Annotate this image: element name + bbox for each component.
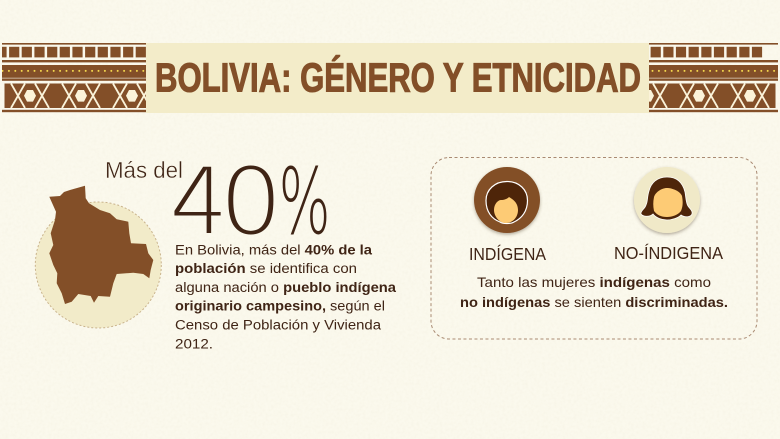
map circle with Bolivia silhouette bbox=[35, 186, 161, 328]
text block: population description: En Bolivia, más del 40% de la bbox=[175, 242, 373, 258]
text block: discrimination statement: no indígenas se sienten discriminadas. bbox=[460, 294, 728, 310]
big number: 40% bbox=[170, 148, 330, 255]
text block: population description bbox=[175, 242, 397, 352]
title banner background bbox=[146, 43, 649, 113]
big number: 40%: 4 bbox=[170, 150, 228, 255]
text block: population description: Censo de Población y Vivienda bbox=[175, 318, 382, 332]
text block: population description: alguna nación o pueblo indígena bbox=[175, 280, 397, 295]
label: no-indígena: NO-ÍNDIGENA bbox=[614, 243, 723, 263]
heading: Más del: Más del bbox=[105, 157, 183, 183]
big number: 40%: % bbox=[279, 148, 330, 255]
big number: 40%: 0 bbox=[220, 150, 283, 255]
text block: population description: originario campesino, según el bbox=[175, 299, 385, 314]
right woven pattern band bbox=[649, 43, 778, 112]
label: indígena: INDÍGENA bbox=[469, 244, 546, 264]
panel: indígena and no-indígena bbox=[431, 158, 757, 339]
text block: discrimination statement: Tanto las mujeres indígenas como bbox=[477, 274, 711, 290]
text block: discrimination statement bbox=[460, 274, 728, 310]
text block: population description: población se identifica con bbox=[175, 261, 357, 276]
icon: indigenous woman bbox=[474, 167, 540, 233]
icon: Bolivia map bbox=[49, 186, 153, 304]
icon: non-indigenous woman bbox=[634, 167, 700, 233]
text block: population description: 2012. bbox=[175, 336, 213, 352]
left woven pattern band bbox=[0, 43, 160, 112]
title: BOLIVIA: GÉNERO Y ETNICIDAD bbox=[155, 54, 641, 100]
